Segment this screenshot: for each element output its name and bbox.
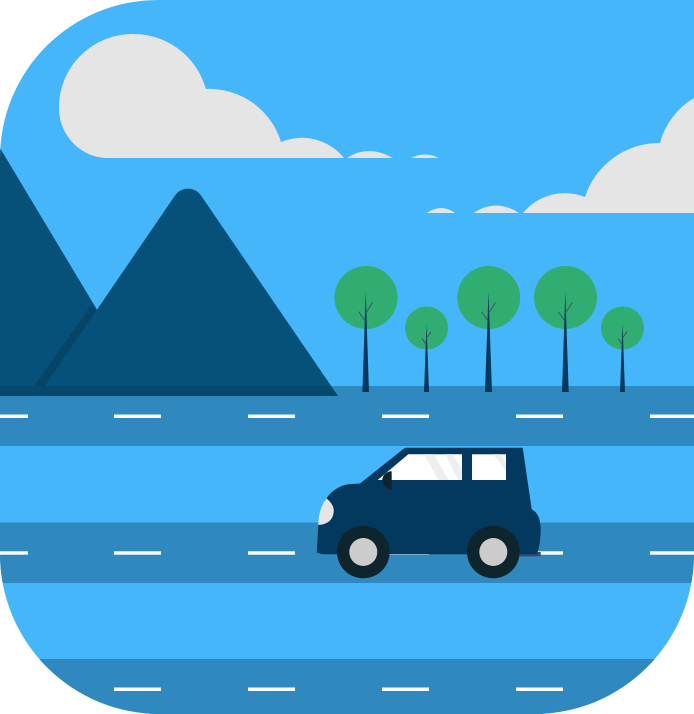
road: top band	[0, 386, 694, 446]
car side mirror	[382, 471, 392, 489]
car front window	[378, 454, 462, 480]
tree 2	[405, 306, 448, 392]
tree 1	[334, 266, 398, 392]
mountain shadow stripe	[34, 304, 96, 386]
car rear window	[472, 454, 506, 480]
car front wheel	[337, 526, 390, 578]
mountains	[0, 148, 338, 396]
tree 4	[534, 266, 597, 392]
car rear wheel	[467, 526, 520, 578]
mountain: left	[0, 148, 97, 386]
tree row	[334, 266, 644, 392]
road: bottom band	[39, 659, 655, 714]
cloud: right	[427, 98, 694, 213]
tree 5	[601, 306, 644, 392]
cloud: upper left	[59, 34, 439, 158]
car headlight	[318, 498, 334, 525]
mountain: centre	[38, 189, 338, 396]
mountain base shadow	[0, 386, 338, 396]
car body	[317, 448, 541, 554]
car exhaust	[518, 552, 541, 556]
tree 3	[457, 266, 520, 392]
car	[317, 448, 541, 578]
road: middle band	[0, 522, 694, 583]
